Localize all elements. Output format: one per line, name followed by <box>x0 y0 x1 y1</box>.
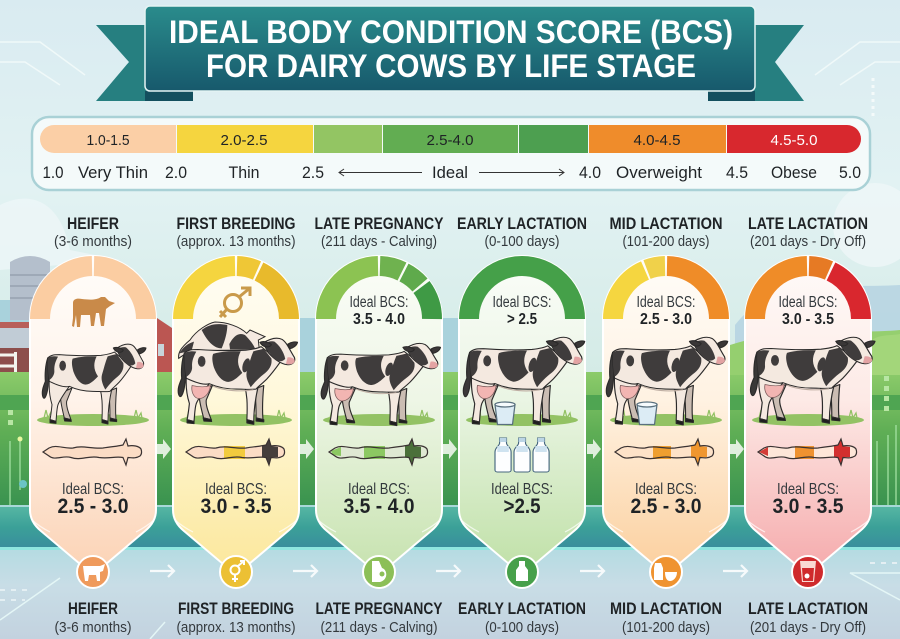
scale labels: 2.0 <box>165 163 187 182</box>
footer label: early lactation: EARLY LACTATION <box>458 599 586 618</box>
ideal BCS value: 2.5 - 3.0 <box>58 495 128 518</box>
footer label: first breeding <box>176 599 296 636</box>
footer label: heifer: HEIFER <box>68 599 118 618</box>
icon: male and female symbol <box>220 288 250 317</box>
gauge text <box>636 294 696 328</box>
footer label: mid lactation: MID LACTATION <box>610 599 722 618</box>
card body <box>316 256 442 575</box>
scale labels: Obese <box>771 163 817 182</box>
footer label: heifer <box>54 599 132 636</box>
age: early lactation: (0-100 days) <box>484 233 560 250</box>
colour bar: 2.5-4.0 <box>426 132 474 149</box>
scale labels: Overweight <box>616 163 702 182</box>
footer label: late lactation <box>748 599 868 636</box>
ideal BCS value: Ideal BCS: <box>62 481 124 498</box>
scale labels: 4.0 <box>579 163 601 182</box>
title banner: IDEAL BODY CONDITION SCORE (BCS) <box>169 14 733 50</box>
footer label: late lactation: (201 days - Dry Off) <box>750 619 866 636</box>
age: heifer: (3-6 months) <box>54 233 132 250</box>
colour bar: 1.0-1.5 <box>86 132 130 149</box>
cow and milk bucket <box>606 337 728 426</box>
gauge text: Ideal BCS: <box>636 294 696 311</box>
gauge text <box>492 294 552 328</box>
colour bar <box>40 125 861 153</box>
arrow: ideal range <box>339 169 564 176</box>
icon badge: heifer <box>77 556 109 588</box>
panel: early lactation <box>457 214 587 636</box>
footer label: first breeding: (approx. 13 months) <box>176 619 296 636</box>
cow <box>37 344 149 426</box>
top view body <box>43 439 142 465</box>
card body <box>745 256 871 575</box>
card body <box>30 256 156 575</box>
arrows between panels <box>150 439 747 577</box>
footer label: late pregnancy: (211 days - Calving) <box>320 619 438 636</box>
card body <box>173 256 299 575</box>
heading: early lactation: EARLY LACTATION <box>457 214 587 233</box>
footer label: heifer: (3-6 months) <box>54 619 132 636</box>
ideal BCS value: >2.5 <box>504 495 541 518</box>
scale labels: Ideal <box>432 163 468 182</box>
gauge <box>183 266 289 319</box>
footer label: late lactation: LATE LACTATION <box>748 599 868 618</box>
ideal BCS value <box>58 481 128 518</box>
icon badge: milk and bowl <box>650 556 682 588</box>
age: late pregnancy: (211 days - Calving) <box>321 233 437 250</box>
card body <box>459 256 585 575</box>
scale labels: 2.5 <box>302 163 324 182</box>
heading: mid lactation: MID LACTATION <box>610 214 722 233</box>
top view body <box>329 439 428 465</box>
heading: late pregnancy: LATE PREGNANCY <box>314 214 444 233</box>
gauge <box>613 266 719 319</box>
ideal BCS value <box>772 481 844 518</box>
ideal BCS value: Ideal BCS: <box>205 481 267 498</box>
top view body <box>615 439 714 465</box>
icon: milk bottles <box>495 438 549 472</box>
ideal BCS value: 3.0 - 3.5 <box>200 495 272 518</box>
age: first breeding: (approx. 13 months) <box>176 233 296 250</box>
scale labels: 5.0 <box>839 163 861 182</box>
icon badge: milk bottle <box>506 556 538 588</box>
panel: first breeding <box>173 214 299 636</box>
scale labels: Thin <box>228 163 260 182</box>
gauge text: 3.5 - 4.0 <box>353 311 405 328</box>
ideal BCS value: 3.5 - 4.0 <box>344 495 414 518</box>
title banner <box>96 6 804 101</box>
heading: heifer: HEIFER <box>67 214 119 233</box>
BCS scale panel <box>32 117 870 190</box>
ideal BCS value: Ideal BCS: <box>491 481 553 498</box>
cow and milk bucket <box>463 337 585 426</box>
gauge text: Ideal BCS: <box>350 294 408 311</box>
icon badge: gender <box>220 556 252 588</box>
footer label: mid lactation <box>610 599 722 636</box>
icon: calf <box>72 297 115 327</box>
icon badge: pregnancy <box>363 556 395 588</box>
ideal BCS value <box>200 481 272 518</box>
colour bar: 4.0-4.5 <box>634 132 680 149</box>
scale labels: 1.0 <box>42 163 64 182</box>
heading: late lactation: LATE LACTATION <box>748 214 868 233</box>
gauge text: 3.0 - 3.5 <box>782 311 834 328</box>
scale labels: Very Thin <box>78 163 148 182</box>
gauge text <box>778 294 838 328</box>
footer label: mid lactation: (101-200 days) <box>622 619 710 636</box>
footer label: late pregnancy: LATE PREGNANCY <box>316 599 443 618</box>
ideal BCS value: Ideal BCS: <box>348 481 410 498</box>
cows <box>178 322 297 426</box>
footer label: late pregnancy <box>316 599 443 636</box>
scale labels <box>42 163 861 182</box>
gauge <box>40 266 146 319</box>
gauge <box>469 266 575 319</box>
footer label: first breeding: FIRST BREEDING <box>178 599 294 618</box>
colour bar: 4.5-5.0 <box>770 132 818 149</box>
ideal BCS value <box>491 481 553 518</box>
panel: heifer <box>30 214 156 636</box>
icon badge: dry off <box>792 556 824 588</box>
title banner: FOR DAIRY COWS BY LIFE STAGE <box>206 48 696 84</box>
gauge text: Ideal BCS: <box>778 294 838 311</box>
gauge text <box>350 294 408 328</box>
age: late lactation: (201 days - Dry Off) <box>750 233 866 250</box>
panel: late lactation <box>745 214 875 636</box>
footer label: early lactation <box>458 599 586 636</box>
cow <box>750 337 875 426</box>
panel: late pregnancy <box>314 214 444 636</box>
ideal BCS value: 2.5 - 3.0 <box>630 495 702 518</box>
ideal BCS value: 3.0 - 3.5 <box>772 495 844 518</box>
top view body <box>758 439 857 465</box>
panel: mid lactation <box>603 214 729 636</box>
heading: first breeding: FIRST BREEDING <box>176 214 296 233</box>
age: mid lactation: (101-200 days) <box>622 233 710 250</box>
gauge <box>755 266 861 319</box>
gauge text: 2.5 - 3.0 <box>640 311 692 328</box>
ideal BCS value <box>630 481 702 518</box>
ideal BCS value: Ideal BCS: <box>635 481 697 498</box>
cow <box>321 343 440 426</box>
gauge text: Ideal BCS: <box>492 294 552 311</box>
footer label: early lactation: (0-100 days) <box>485 619 559 636</box>
gauge text: > 2.5 <box>507 311 537 328</box>
scale labels: 4.5 <box>726 163 748 182</box>
ideal BCS value: Ideal BCS: <box>777 481 839 498</box>
colour bar: 2.0-2.5 <box>220 132 268 149</box>
card body <box>603 256 729 575</box>
gauge <box>326 266 432 319</box>
top view body <box>186 439 285 465</box>
ideal BCS value <box>344 481 414 518</box>
